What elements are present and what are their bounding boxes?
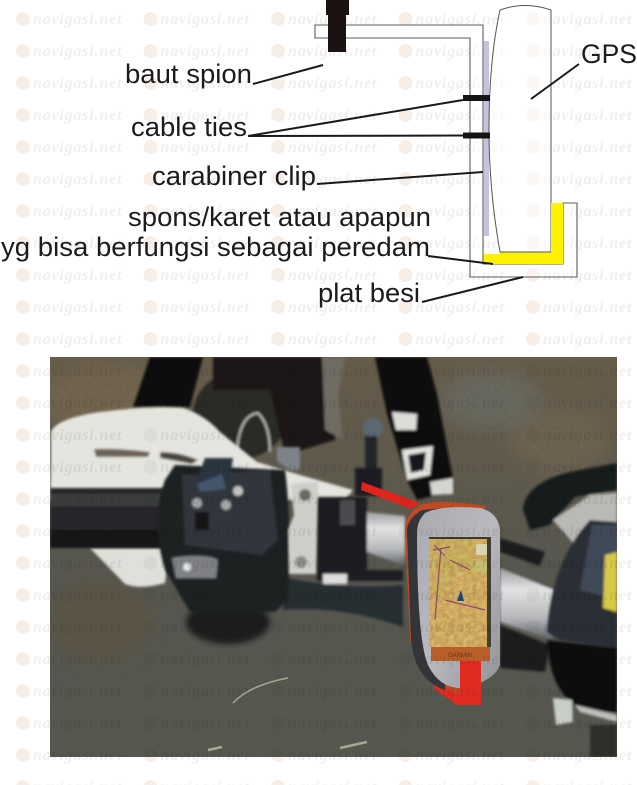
- map screen: [429, 537, 491, 647]
- photo: GPS mounted on motorcycle handlebar: [50, 357, 617, 757]
- cable tie upper: [463, 95, 490, 101]
- map zoom buttons: [476, 544, 487, 555]
- label: plat besi: plat besi: [318, 278, 420, 308]
- handlebar: [50, 488, 555, 672]
- ground: [40, 357, 617, 757]
- hand guard: [50, 407, 353, 587]
- label: GPS: GPS: [581, 39, 637, 69]
- icon: mirror bolt: [326, 0, 349, 52]
- label: damper line 2: yg bisa berfungsi sebagai peredam: [1, 232, 430, 262]
- carabiner clip strip: [484, 41, 489, 236]
- photo watermark: [50, 357, 617, 757]
- icon: bracket plate: [315, 25, 577, 277]
- switch housing: [158, 458, 289, 612]
- right mirror and fairing: [523, 463, 617, 757]
- label: damper line 1: spons/karet atau apapun: [128, 202, 431, 232]
- handlebar clamp: [288, 482, 318, 574]
- red strap bottom: [433, 660, 481, 705]
- red strap top: [361, 482, 420, 509]
- tire top and rider: [133, 357, 455, 500]
- lower tire: [186, 600, 270, 644]
- map position marker: [457, 590, 464, 601]
- label: cable ties: cable ties: [131, 112, 247, 142]
- leader lines: [248, 64, 579, 302]
- GPS device: GARMIN: [448, 653, 472, 659]
- GPS device: [405, 502, 500, 705]
- icon: GPS outline: [489, 6, 551, 252]
- diagram: GPS mounting bracket: [315, 0, 577, 277]
- yellow damper: [484, 203, 563, 264]
- cable tie lower: [463, 132, 490, 138]
- device front: [417, 507, 500, 688]
- red strap over device: [460, 661, 481, 705]
- device side: [405, 502, 485, 700]
- orange brand strip: [431, 647, 490, 661]
- label: baut spion: baut spion: [125, 59, 252, 89]
- label: carabiner clip: carabiner clip: [152, 161, 316, 191]
